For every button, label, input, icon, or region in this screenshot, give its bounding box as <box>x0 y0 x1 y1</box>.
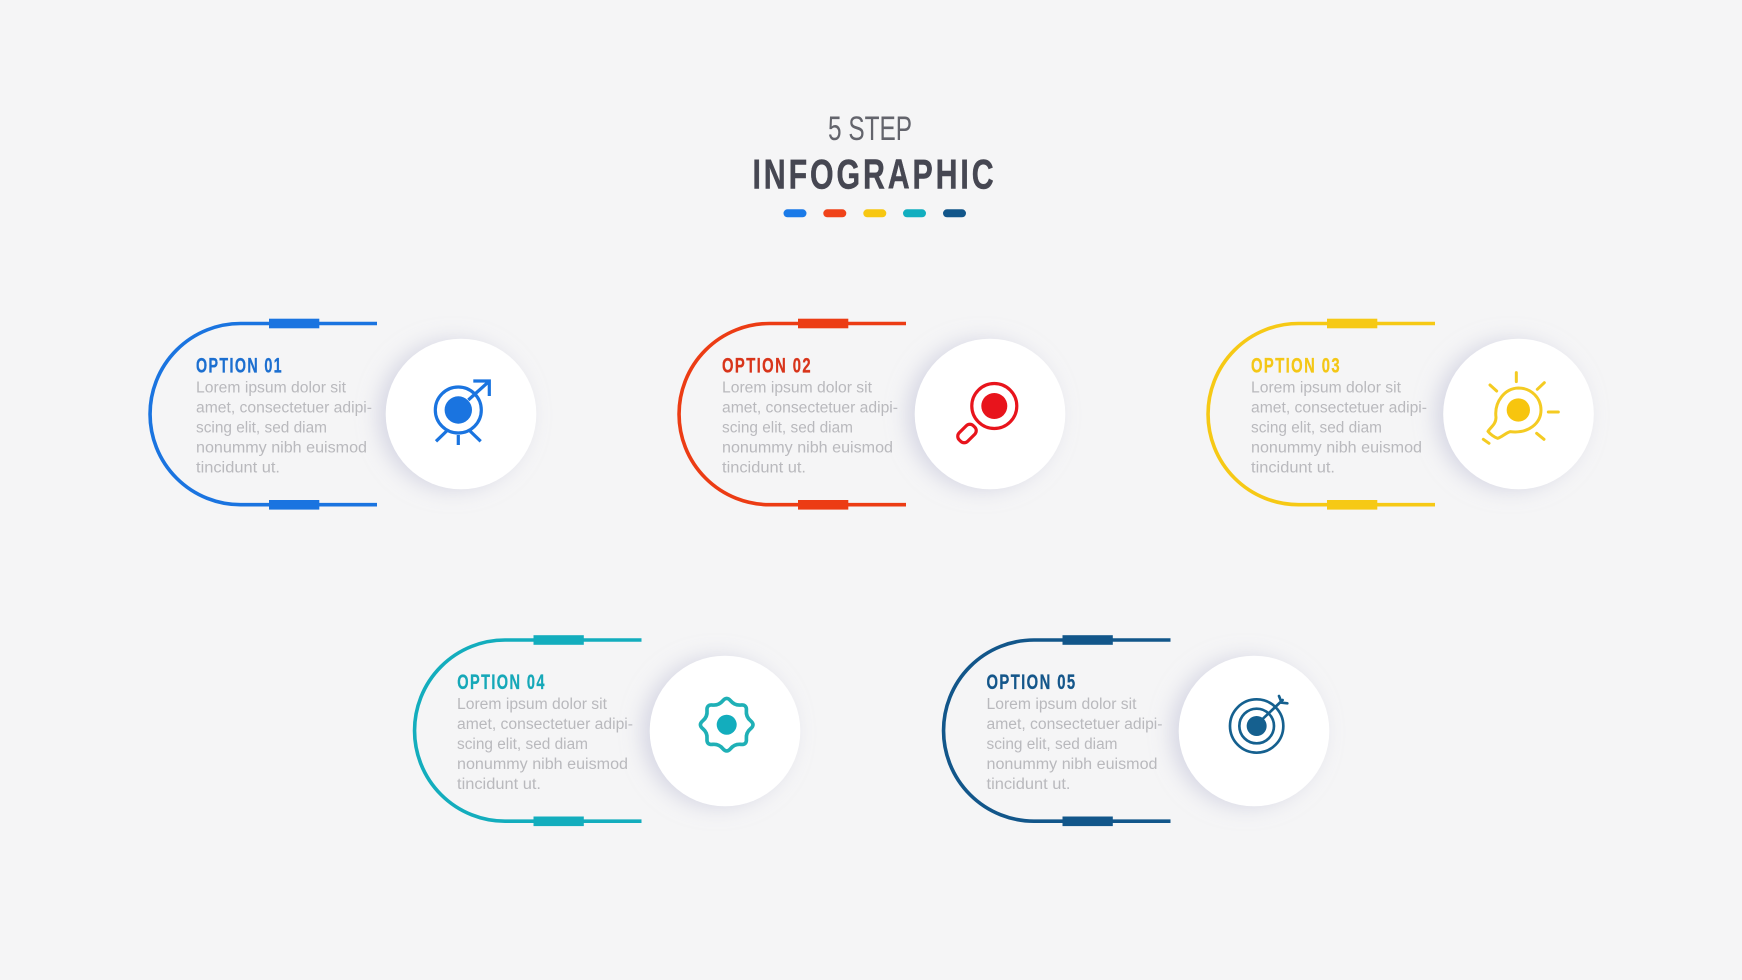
icon circle <box>1179 656 1329 806</box>
icon: dartboard with arrow <box>1230 696 1287 753</box>
body text: tincidunt ut. <box>722 459 806 476</box>
heading: OPTION 05 <box>986 671 1076 694</box>
icon: gear <box>700 698 753 751</box>
body text: scing elit, sed diam <box>986 736 1118 753</box>
colour dots under title <box>784 209 966 217</box>
title line 2: INFOGRAPHIC: INFOGRAPHIC <box>752 150 996 197</box>
body text: amet, consectetuer adipi- <box>1251 399 1427 416</box>
body text: scing elit, sed diam <box>1251 419 1382 436</box>
heading: OPTION 03 <box>1251 355 1341 378</box>
body text: Lorem ipsum dolor sit <box>1251 379 1402 396</box>
body text: nonummy nibh euismod <box>1251 439 1422 456</box>
icon circle <box>915 339 1065 489</box>
body text: amet, consectetuer adipi- <box>722 399 898 416</box>
icon: light bulb <box>1483 373 1558 443</box>
icon circle <box>1443 339 1594 489</box>
icon circle <box>650 656 800 806</box>
heading: OPTION 02 <box>722 355 812 378</box>
body text: amet, consectetuer adipi- <box>196 399 372 416</box>
heading: OPTION 01 <box>196 355 283 378</box>
body text: Lorem ipsum dolor sit <box>722 379 873 396</box>
title line 1: 5 STEP: 5 STEP <box>828 110 912 148</box>
body text: amet, consectetuer adipi- <box>986 716 1162 733</box>
body text <box>1251 379 1427 476</box>
body text: Lorem ipsum dolor sit <box>986 696 1137 713</box>
panel: option 01 <box>150 319 536 510</box>
body text <box>196 379 372 476</box>
body text: tincidunt ut. <box>1251 459 1335 476</box>
body text: scing elit, sed diam <box>457 736 588 753</box>
panel: option 03 <box>1208 319 1594 510</box>
body text: nonummy nibh euismod <box>196 439 367 456</box>
body text: nonummy nibh euismod <box>457 756 628 773</box>
heading: OPTION 04 <box>457 671 546 694</box>
bracket outline <box>679 319 906 510</box>
body text: Lorem ipsum dolor sit <box>457 696 608 713</box>
panel: option 05 <box>944 635 1329 826</box>
body text: tincidunt ut. <box>986 776 1070 793</box>
body text: Lorem ipsum dolor sit <box>196 379 347 396</box>
icon: magnifier <box>956 384 1017 445</box>
body text <box>457 696 633 793</box>
body text: tincidunt ut. <box>196 459 280 476</box>
body text: amet, consectetuer adipi- <box>457 716 633 733</box>
panel: option 04 <box>415 635 800 826</box>
bracket outline <box>415 635 642 826</box>
icon circle <box>386 339 536 489</box>
bracket outline <box>1208 319 1435 510</box>
title <box>752 110 996 197</box>
body text <box>722 379 898 476</box>
bracket outline <box>944 635 1170 826</box>
body text: scing elit, sed diam <box>196 419 327 436</box>
body text: nonummy nibh euismod <box>722 439 893 456</box>
body text: scing elit, sed diam <box>722 419 853 436</box>
bracket outline <box>150 319 377 510</box>
body text <box>986 696 1162 793</box>
panel: option 02 <box>679 319 1065 510</box>
body text: nonummy nibh euismod <box>986 756 1158 773</box>
body text: tincidunt ut. <box>457 776 541 793</box>
icon: target with arrow <box>435 381 489 445</box>
